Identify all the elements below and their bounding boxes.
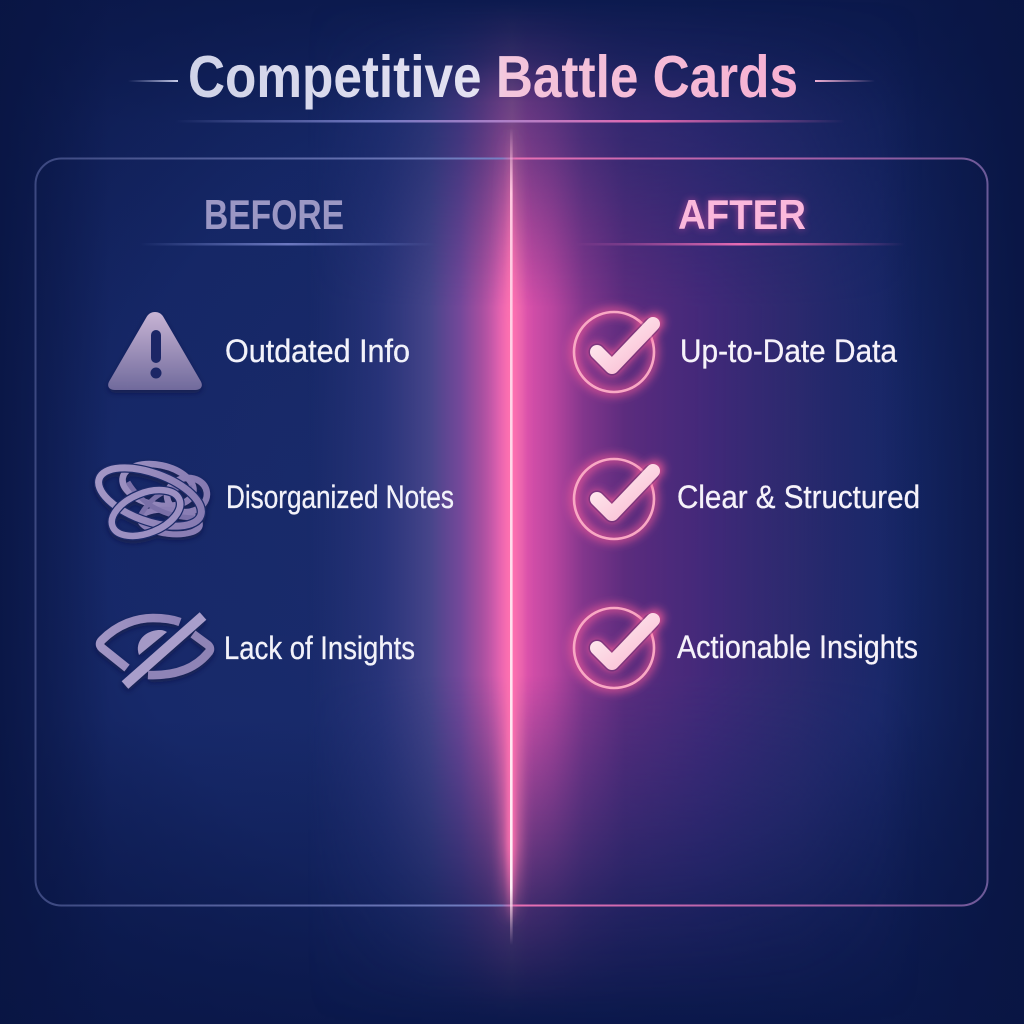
label: outdated info: Outdated Info — [225, 333, 410, 369]
label: actionable insights: Actionable Insights — [677, 629, 918, 665]
title rule — [175, 120, 845, 122]
title decoration: left dash — [128, 80, 178, 82]
title text: Competitive Battle Cards — [188, 44, 798, 110]
icon: check circle 2 — [574, 459, 655, 539]
icon: tangled knot — [91, 456, 210, 545]
icon: warning triangle — [108, 312, 202, 390]
panel: before — [91, 191, 454, 685]
label: disorganized notes: Disorganized Notes — [226, 479, 454, 515]
after heading glow: AFTER — [678, 191, 806, 238]
before heading: BEFORE — [204, 191, 344, 238]
after heading underline — [575, 243, 905, 246]
label: lack of insights: Lack of Insights — [224, 630, 415, 666]
panel: after — [574, 191, 920, 688]
label: clear and structured: Clear & Structured — [677, 479, 920, 515]
label: up-to-date data: Up-to-Date Data — [680, 333, 897, 369]
icon: crossed-out eye — [100, 616, 210, 685]
icon: check circle 1 — [574, 312, 655, 392]
title decoration: right dash — [815, 80, 875, 82]
panel: comparison card frame — [36, 158, 988, 906]
icon: check circle 3 — [574, 608, 655, 688]
center glowing divider — [503, 125, 519, 945]
after heading text: AFTER — [678, 191, 806, 238]
before heading underline — [140, 243, 435, 246]
